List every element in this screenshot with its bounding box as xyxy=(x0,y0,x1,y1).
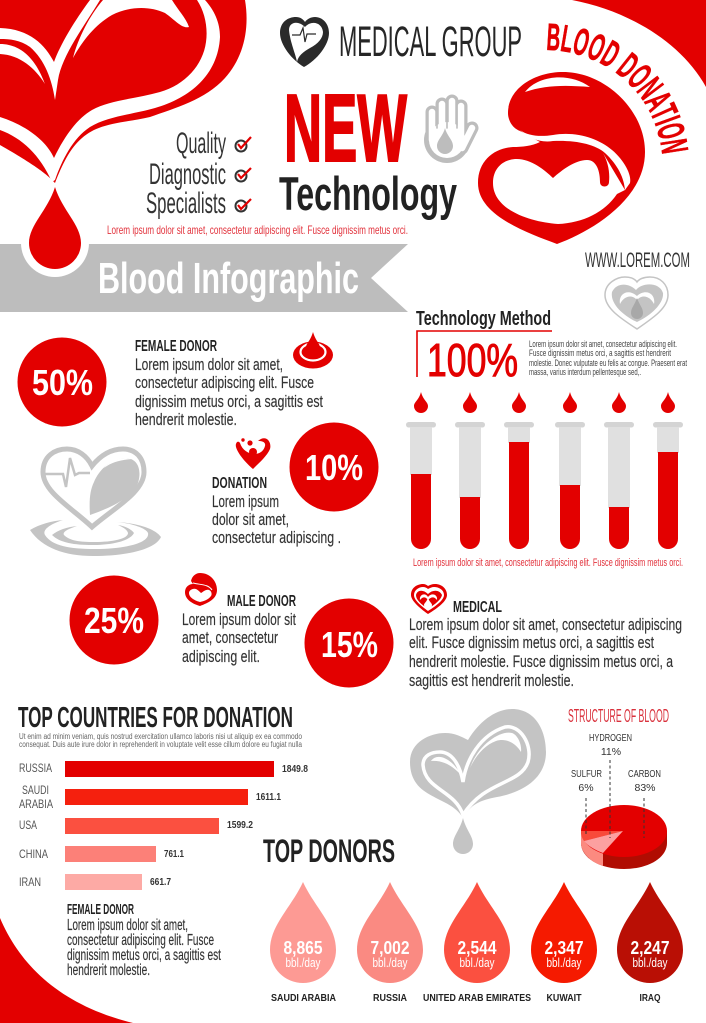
tube 5 xyxy=(604,392,634,549)
drop: Iraq: 2,247 xyxy=(630,938,670,958)
item: Specialists: Specialists xyxy=(146,187,226,220)
text block: male donor: Lorem ipsum dolor sit xyxy=(182,610,296,629)
text block: female donor: FEMALE DONOR xyxy=(135,338,217,355)
panel: technology method xyxy=(416,308,687,386)
drop: Russia: bbl./day xyxy=(372,955,408,970)
icon: gray hand with drop xyxy=(424,101,472,163)
stat: 10% xyxy=(290,422,378,512)
bar chart: 1849.8 xyxy=(282,764,308,775)
logo: medical heart mark xyxy=(280,17,329,67)
labels: 11% xyxy=(601,746,621,758)
tube 2 xyxy=(455,392,485,549)
text block: medical: sagittis est hendrerit molestie. xyxy=(409,671,574,690)
drop: Russia: 7,002 xyxy=(370,938,410,958)
drop: Iraq: IRAQ xyxy=(640,993,661,1004)
drop: Kuwait xyxy=(531,882,597,1004)
text block: female donor xyxy=(67,901,221,979)
text block: donation: consectetur adipiscing . xyxy=(212,528,341,547)
text block: female donor: hendrerit molestie. xyxy=(135,410,237,429)
heading: Technology Method xyxy=(416,308,551,330)
checklist xyxy=(146,127,251,220)
bar chart: 1611.1 xyxy=(256,792,281,803)
icon: gray heart with pulse xyxy=(30,449,161,556)
heading: New: NEW xyxy=(284,75,407,182)
drop: Iraq xyxy=(617,882,683,1004)
text block: donation xyxy=(212,475,341,547)
drop: Saudi Arabia: bbl./day xyxy=(286,955,321,970)
text block: female donor: consectetur adipiscing elit. Fusce xyxy=(67,932,214,949)
stat: 10%: 10% xyxy=(305,447,363,488)
tube 6 xyxy=(653,392,683,549)
caption: red lorem: Lorem ipsum dolor sit amet, consectetur adipiscing elit. Fusce dignissim metus orci. xyxy=(107,223,408,237)
icon: large blood heart with drop xyxy=(0,0,247,277)
tube 1 xyxy=(406,392,436,549)
tube 3 xyxy=(504,392,534,549)
intro text xyxy=(19,732,302,749)
drop: Kuwait: 2,347 xyxy=(544,938,584,958)
drop: Kuwait: KUWAIT xyxy=(546,993,582,1004)
text block: female donor: Lorem ipsum dolor sit amet, xyxy=(67,917,188,934)
3d pie chart xyxy=(581,760,667,869)
bar chart: IRAN xyxy=(19,875,41,889)
corner: bottom-left red arc xyxy=(0,918,133,1023)
ribbon title: Blood Infographic xyxy=(98,254,359,303)
bar chart: RUSSIA xyxy=(19,761,52,775)
icon: gray heart with drop xyxy=(410,709,546,854)
icon: checks xyxy=(236,137,251,212)
heading: Medical Group: MEDICAL GROUP xyxy=(339,18,522,66)
labels: HYDROGEN xyxy=(589,732,632,744)
bar chart: 661.7 xyxy=(150,877,171,888)
icon: red medical heart xyxy=(411,584,447,614)
bar chart: 761.1 xyxy=(164,849,184,860)
stat: 100%: 100% xyxy=(427,334,518,386)
text block: medical: MEDICAL xyxy=(453,599,502,616)
bar chart: CHINA xyxy=(19,847,48,861)
drop: Russia: RUSSIA xyxy=(373,993,407,1004)
text block: female donor: hendrerit molestie. xyxy=(67,962,150,979)
rule xyxy=(417,331,552,377)
bar chart xyxy=(19,761,308,890)
text block: male donor xyxy=(182,593,296,666)
drop: United Arab Emirates xyxy=(423,882,531,1004)
text block: female donor: Lorem ipsum dolor sit amet, xyxy=(135,355,283,374)
drop: United Arab Emirates: 2,544 xyxy=(458,938,496,958)
drop: Saudi Arabia: 8,865 xyxy=(284,938,322,958)
stat: 15%: 15% xyxy=(321,624,378,665)
panel: structure of blood xyxy=(568,706,669,869)
text block: female donor: dignissim metus orci, a sagittis est xyxy=(135,392,323,411)
labels: 6% xyxy=(578,782,594,794)
drop: Saudi Arabia: SAUDI ARABIA xyxy=(271,993,336,1004)
text block: male donor: amet, consectetur xyxy=(182,628,278,647)
icon: red donation heart xyxy=(236,438,270,469)
heading: TOP COUNTRIES FOR DONATION xyxy=(18,702,293,734)
text block: medical xyxy=(409,599,682,690)
text block: donation: Lorem ipsum xyxy=(212,492,279,511)
bar chart: USA xyxy=(19,818,37,832)
stat: 50% xyxy=(18,338,106,426)
drop: United Arab Emirates: bbl./day xyxy=(460,955,495,970)
heading: Technology: Technology xyxy=(279,167,457,220)
text block: female donor xyxy=(135,338,323,429)
text block: female donor: dignissim metus orci, a sagittis est xyxy=(67,947,221,964)
stat: 15% xyxy=(304,598,394,688)
text block: donation: DONATION xyxy=(212,475,267,492)
drop: Russia xyxy=(357,882,423,1004)
drop: Kuwait: bbl./day xyxy=(546,955,582,970)
labels: 83% xyxy=(634,782,656,794)
icon: red drop rings xyxy=(293,332,333,368)
banner ribbon: Blood Infographic xyxy=(0,244,408,312)
bar chart: SAUDI xyxy=(22,783,49,797)
intro text: Ut enim ad minim veniam, quis nostrud exercitation ullamco laboris nisi ut aliquip ex ea commodo xyxy=(19,732,302,741)
heading: curved Blood Donation: BLOOD DONATION xyxy=(547,23,688,154)
icon: big red heart and drop logo xyxy=(478,72,645,244)
chart: donor drops xyxy=(270,882,683,1004)
item: Diagnostic: Diagnostic xyxy=(149,158,226,191)
drop: United Arab Emirates: UNITED ARAB EMIRATES xyxy=(423,993,531,1004)
bar chart: ARABIA xyxy=(19,797,53,811)
text block: male donor: adipiscing elit. xyxy=(182,647,260,666)
bar chart: 1599.2 xyxy=(227,820,253,831)
chart: test tubes xyxy=(406,392,683,549)
stat: 50%: 50% xyxy=(32,362,93,403)
stat: 25% xyxy=(70,576,158,664)
intro text: consequat. Duis aute irure dolor in reprehenderit in voluptate velit esse cillum dolore eu fugiat nulla xyxy=(19,740,302,749)
panel: top countries for donation xyxy=(18,702,308,979)
drop: Saudi Arabia xyxy=(270,882,336,1004)
text block: female donor: FEMALE DONOR xyxy=(67,901,134,918)
body text: massa, varius interdum pellentesque sed,. xyxy=(529,367,641,377)
heading: top donors: TOP DONORS xyxy=(263,833,395,869)
corner: top-right red arc xyxy=(572,0,706,87)
icon: small red heart drop xyxy=(185,573,217,606)
labels xyxy=(571,732,661,794)
labels: SULFUR xyxy=(571,768,602,780)
text block: female donor: consectetur adipiscing elit. Fusce xyxy=(135,373,314,392)
tube 4 xyxy=(555,392,585,549)
labels: CARBON xyxy=(628,768,661,780)
item: Quality: Quality xyxy=(176,127,226,160)
body text xyxy=(529,339,687,377)
icon: gray small heart xyxy=(605,277,668,329)
stat: 25%: 25% xyxy=(84,600,144,641)
drop: Iraq: bbl./day xyxy=(632,955,668,970)
text block: male donor: MALE DONOR xyxy=(227,593,296,610)
text block: donation: dolor sit amet, xyxy=(212,510,289,529)
